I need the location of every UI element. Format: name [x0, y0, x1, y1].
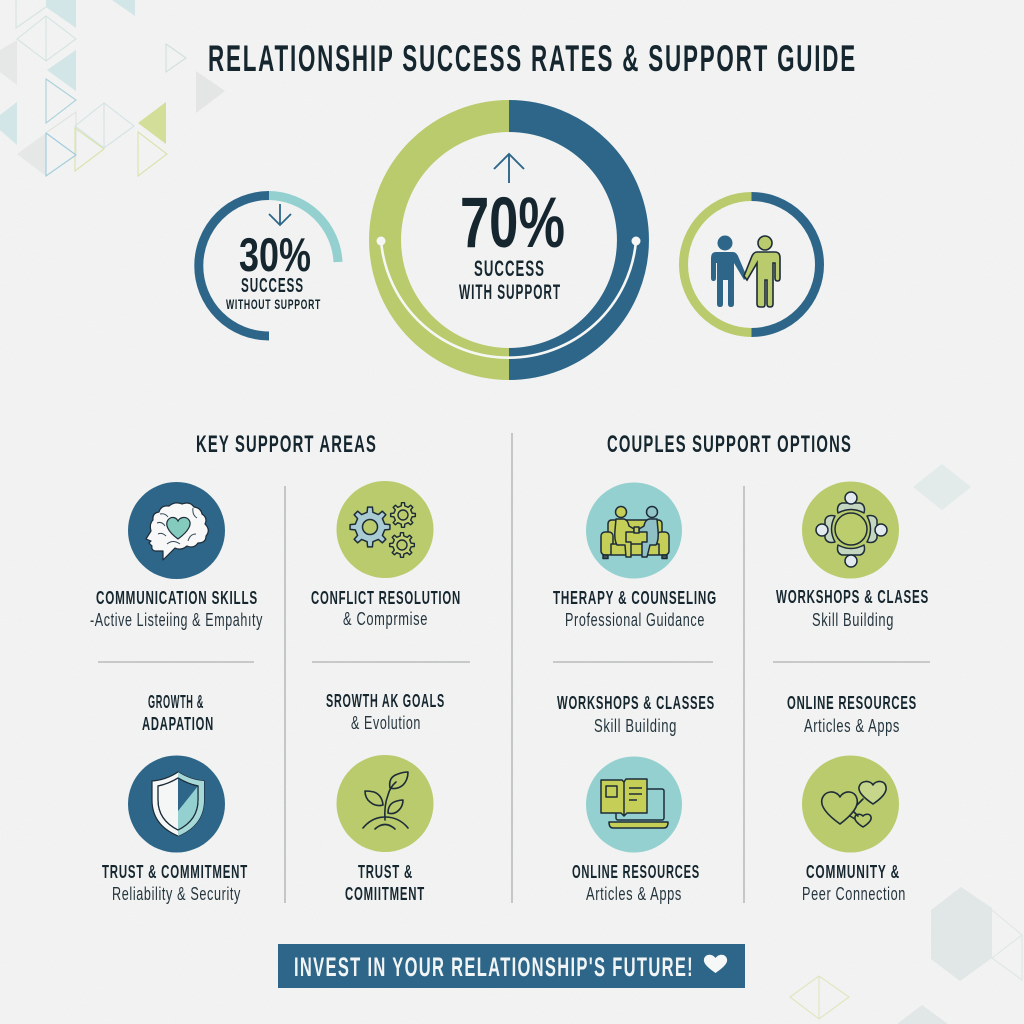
sublabel: & Comprmise — [343, 609, 428, 629]
background shapes right and bottom — [790, 464, 1022, 1024]
item: growth and adapation — [142, 692, 214, 734]
item: communication skills — [90, 482, 263, 630]
sublabel: -Active Listeiing & Empahıty — [90, 610, 263, 630]
item: conflict resolution — [311, 481, 461, 629]
arrow: down — [269, 204, 291, 225]
panel: 30% success without support — [199, 196, 338, 336]
ring: couple — [684, 196, 820, 332]
label: ONLINE RESOURCES — [572, 862, 700, 882]
label line 2: COMIITMENT — [345, 884, 425, 904]
label: SROWTH AK GOALS — [326, 691, 445, 711]
background triangles top left — [0, 0, 225, 176]
icon: connected hearts — [802, 756, 899, 852]
label: WORKSHOPS & CLASES — [776, 587, 929, 607]
label: COMMUNICATION SKILLS — [96, 588, 258, 608]
sublabel: & Evolution — [351, 713, 421, 733]
item: community and peer connection — [802, 756, 906, 904]
white arc with end dots — [376, 236, 640, 358]
label line 1: GROWTH & — [148, 692, 204, 712]
item: trust and comiitment — [336, 755, 434, 904]
sublabel: Professional Guidance — [565, 610, 705, 630]
label: success: SUCCESS — [241, 275, 304, 297]
icon: couple on couch — [586, 482, 682, 578]
sublabel: Articles & Apps — [586, 884, 682, 904]
icon: round table with four people — [802, 482, 899, 578]
label line 1: TRUST & — [358, 862, 413, 882]
item: workshops and classes top — [776, 482, 929, 630]
label: ONLINE RESOURCES — [787, 693, 917, 713]
heading: key support areas: KEY SUPPORT AREAS — [196, 431, 377, 458]
item: online resources bottom — [572, 756, 700, 904]
icon: white heart — [704, 955, 727, 973]
call to action banner — [278, 944, 745, 988]
banner background — [278, 944, 745, 988]
item: therapy and counseling — [553, 482, 717, 630]
panel: couple ring — [684, 196, 820, 332]
banner text: INVEST IN YOUR RELATIONSHIP'S FUTURE! — [294, 952, 694, 982]
ring: 70% progress — [385, 116, 633, 364]
icon: shield — [128, 756, 225, 852]
item: workshops and classes middle — [557, 693, 715, 736]
label: WORKSHOPS & CLASSES — [557, 693, 715, 713]
sublabel: Skill Building — [594, 716, 677, 736]
sublabel: Articles & Apps — [804, 716, 900, 736]
sublabel: Peer Connection — [802, 884, 906, 904]
arrow: up — [494, 154, 524, 183]
label: with support: WITH SUPPORT — [459, 281, 561, 304]
label: THERAPY & COUNSELING — [553, 588, 717, 608]
sublabel: Skill Building — [812, 610, 894, 630]
label: success: SUCCESS — [474, 256, 545, 281]
ring: 30% progress — [199, 196, 338, 336]
icon: brain with heart — [128, 482, 225, 579]
item: online resources middle — [787, 693, 917, 736]
panel: 70% success with support — [376, 116, 640, 364]
item: srowth goals — [326, 691, 445, 733]
icon: book and laptop — [586, 756, 682, 852]
stat: 70%: 70% — [460, 184, 565, 263]
item: trust and commitment — [102, 756, 248, 904]
icon: two people holding hands — [711, 236, 780, 307]
label line 2: ADAPATION — [142, 714, 214, 734]
label: TRUST & COMMITMENT — [102, 862, 248, 882]
label: COMMUNITY & — [806, 862, 900, 882]
icon: sprout — [336, 755, 434, 852]
heading: couples support options: COUPLES SUPPORT OPTIONS — [607, 431, 852, 458]
icon: gears — [336, 481, 434, 578]
sublabel: Reliability & Security — [112, 884, 241, 904]
label: without support: WITHOUT SUPPORT — [226, 296, 321, 312]
stat: 30%: 30% — [239, 228, 311, 281]
label: CONFLICT RESOLUTION — [311, 588, 461, 608]
